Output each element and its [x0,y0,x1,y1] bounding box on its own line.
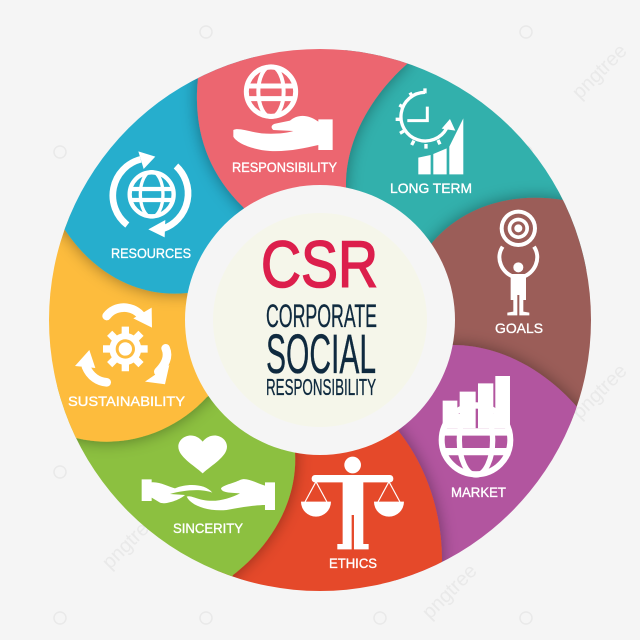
icon: globe with circular arrows [113,151,188,237]
icon: person as scales [301,457,404,549]
panel: ethics (red-orange) [216,425,450,591]
panel: long term (teal) [345,50,586,270]
label: sustainability: SUSTAINABILITY [68,393,186,409]
label: ethics: ETHICS [329,555,377,571]
subtitle: corporate: CORPORATE [266,298,377,334]
panel: responsibility (coral) [188,49,414,214]
inner white circle [185,185,455,455]
subtitle: social: SOCIAL [266,322,376,385]
label: goals: GOALS [495,320,543,336]
title: CSR: CSR [261,227,378,301]
label: sincerity: SINCERITY [173,520,244,536]
panel: sustainability (yellow) [49,214,214,450]
icon: gear with cycle arrows [75,308,169,384]
icon: globe with bar chart [442,376,510,475]
panel: goals (brown) [426,189,591,423]
icon: heart and hands [142,435,275,510]
icon: target held by person [499,210,537,315]
inner cream circle [213,213,427,427]
watermarks: pngtree [568,40,632,104]
watermarks: pngtree [98,510,162,574]
label: market: MARKET [451,484,506,500]
label: long term: LONG TERM [390,180,472,196]
label: resources: RESOURCES [111,245,191,261]
panel: resources (blue) [60,56,256,304]
icon: globe on hand [233,66,333,151]
panel: market (purple) [394,336,580,581]
subtitle: responsibility: RESPONSIBILITY [266,374,376,400]
watermarks: pngtree [418,560,482,624]
icon: clock and rising bars [396,88,463,174]
watermarks: pngtree [568,360,632,424]
label: responsibility: RESPONSIBILITY [232,159,338,175]
wheel segments [49,49,591,591]
panel: sincerity (green) [56,384,306,580]
